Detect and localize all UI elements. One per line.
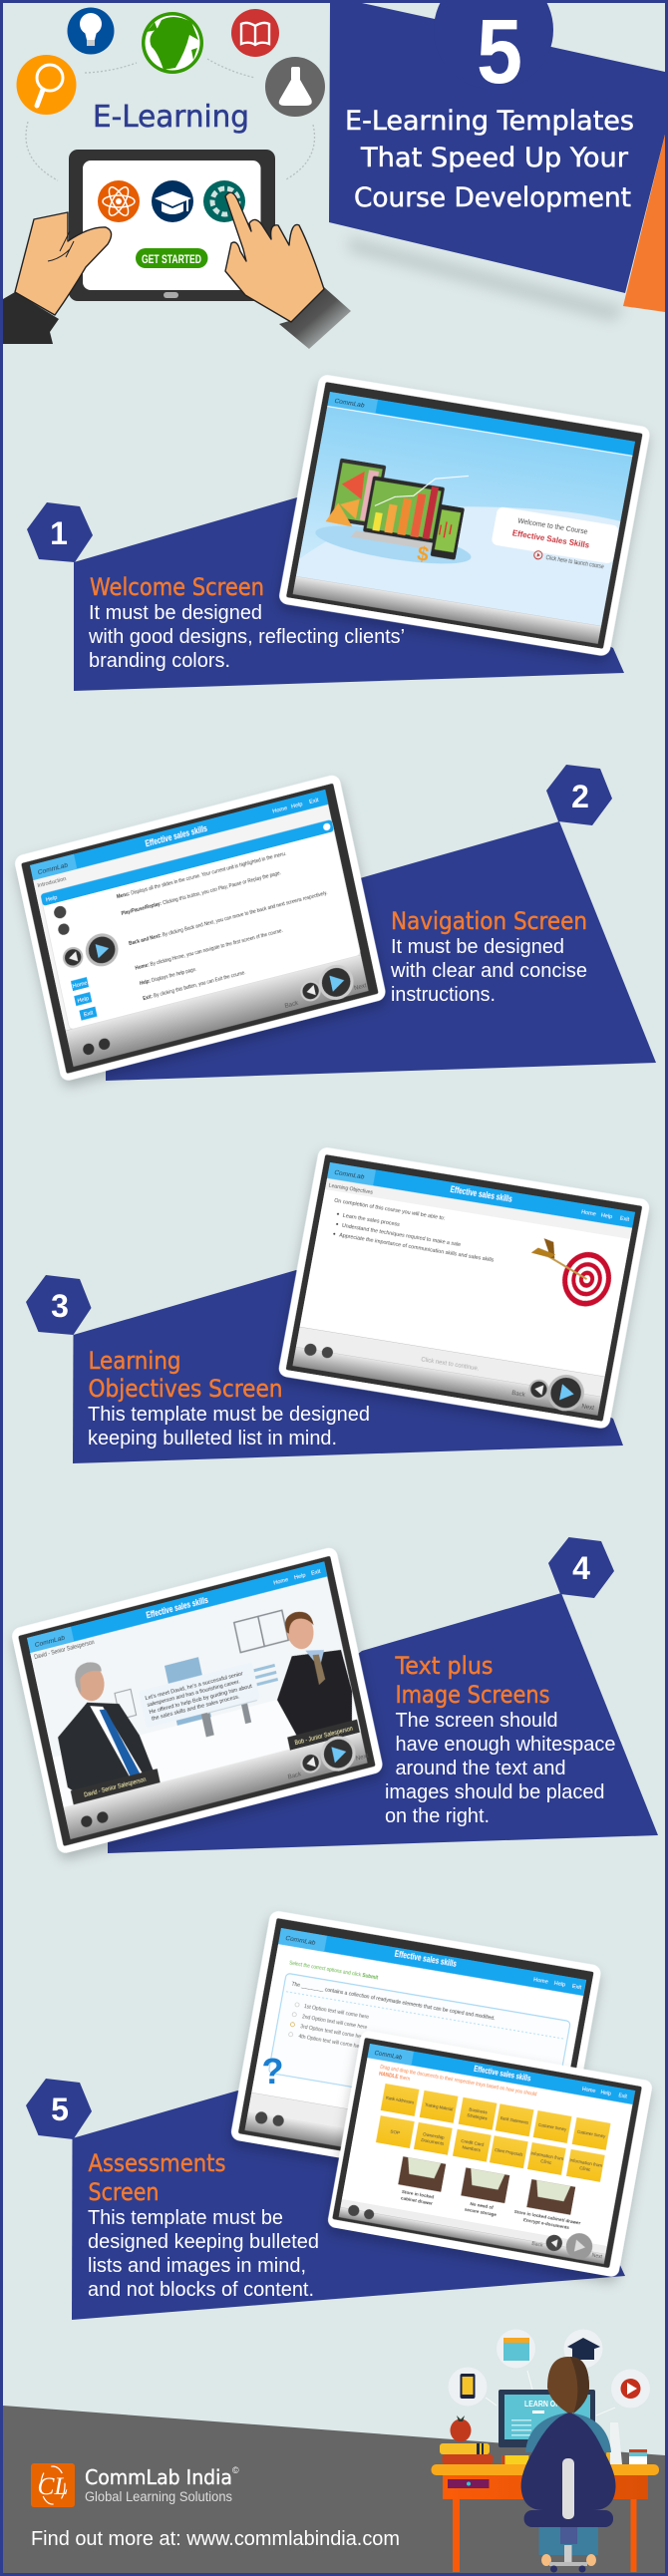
objectives list [328, 1198, 501, 1264]
section 1: welcome screen [27, 374, 651, 691]
sticky notes: Training Material [425, 2101, 454, 2111]
text: navigation screen: It must be designed [391, 936, 564, 958]
sticky notes: Information from [569, 2157, 603, 2168]
ribbon [73, 1270, 623, 1463]
text: welcome screen [88, 573, 405, 672]
text: learning objectives [88, 1347, 370, 1449]
icon: atom [98, 180, 140, 222]
right hand [225, 192, 351, 349]
objectives list: Appreciate the importance of communication skills and sales skills [339, 1233, 495, 1264]
screenshot: navigation [13, 774, 387, 1083]
screenshot: drag and drop: Drag and drop the documents to their respective trays based on how you should [380, 2065, 537, 2097]
section 4: text plus image screens [10, 1537, 658, 1855]
e-learning illustration [3, 8, 351, 349]
speech box [139, 1662, 260, 1729]
heading: E-Learning: E-Learning [93, 100, 249, 135]
document trays: cabinet drawer [401, 2195, 434, 2206]
document trays [396, 2156, 587, 2232]
screenshot: navigation: Exit [309, 798, 320, 805]
text: assessments: and not blocks of content. [88, 2279, 314, 2301]
text: text plus image: The screen should [395, 1710, 558, 1732]
icon: palette [203, 180, 245, 222]
player controls: Next [591, 2253, 603, 2261]
sticky notes: Information from [530, 2150, 564, 2161]
text: learning objectives: This template must be designed [88, 1404, 370, 1426]
screenshot: multiple choice quiz: Help [553, 1981, 566, 1989]
desk [431, 2464, 659, 2572]
answer options: 3rd Option text will come here [300, 2024, 366, 2041]
sticky notes: Credit Card [461, 2138, 485, 2147]
document trays: secure storage [465, 2206, 498, 2217]
text: navigation screen: Navigation Screen [391, 907, 587, 935]
name tags [71, 1718, 360, 1805]
button: get started [136, 248, 207, 268]
screenshot: navigation: Introduction [37, 876, 67, 889]
sticky notes: SOP [390, 2128, 401, 2135]
screenshot: drag and drop: CommLab [374, 2050, 403, 2062]
help dialog: Home [72, 980, 88, 990]
player controls: Back [284, 1000, 300, 1010]
text: welcome screen: branding colors. [89, 650, 230, 672]
screenshot: text plus image: Exit [311, 1569, 322, 1577]
monitor: LEARN ONLINE [524, 2400, 577, 2409]
screenshot: text plus image: Effective sales skills [146, 1595, 209, 1621]
screenshot: objectives: Exit [619, 1216, 630, 1223]
help dialog: Play/Pause/Replay: Clicking this button, you can Play, Pause or Replay the page. [121, 870, 282, 917]
screenshot: objectives: CommLab [334, 1169, 365, 1181]
help dialog [40, 819, 361, 1030]
icon bubbles [449, 2329, 650, 2409]
text: assessments: designed keeping bulleted [88, 2231, 319, 2253]
document trays: Encrypt e-documents [523, 2217, 570, 2230]
sticky notes: Rank Addresses [386, 2094, 415, 2104]
screenshot: text plus image: David - Senior Salesperson [34, 1640, 95, 1661]
screenshot: welcome [278, 374, 651, 657]
hexagon number 4: 4 [572, 1550, 590, 1586]
welcome card: Effective Sales Skills [511, 527, 590, 550]
hexagon number 5: 5 [51, 2092, 69, 2127]
help dialog: Help [45, 895, 58, 903]
text: welcome screen: with good designs, reflecting clients’ [88, 626, 405, 648]
document trays: Store in locked [402, 2189, 435, 2200]
screenshot: welcome: CommLab [334, 398, 365, 410]
screenshot: navigation: Effective sales skills [145, 823, 208, 849]
screenshot: navigation: CommLab [37, 862, 69, 876]
icon: book [231, 9, 279, 57]
big number 5: 5 [477, 1, 522, 103]
screenshot: multiple choice quiz: Effective sales skills [394, 1949, 458, 1969]
sticky notes: Customer Survey [577, 2128, 606, 2138]
icon: light bulb [68, 8, 114, 54]
screenshot: multiple choice quiz: The ________ contains a collection of readymade elements that can be copied and modified. [291, 1981, 496, 2022]
icon: graduation cap [152, 180, 193, 222]
text: assessments: Assessments [88, 2149, 225, 2177]
screenshot: drag and drop [327, 2030, 653, 2278]
ribbon [108, 1593, 658, 1853]
objectives list: Learn the sales process [342, 1213, 401, 1228]
section 2: navigation screen [13, 765, 656, 1083]
icon: globe [142, 12, 203, 74]
answer options: 1st Option text will come here [303, 2004, 369, 2021]
screenshot: text plus image [10, 1546, 384, 1855]
screenshot: drag and drop: Help [600, 2090, 611, 2097]
player controls [301, 1332, 599, 1416]
help dialog: Menu: Displays all the slides in the course. Your current unit is highlighted in the menu. [117, 851, 287, 900]
player controls: Back [287, 1771, 303, 1781]
sticky notes: Documents [421, 2137, 445, 2146]
screenshot: multiple choice quiz: Exit [571, 1984, 582, 1991]
text: text plus image: images should be placed [385, 1781, 604, 1803]
text: text plus image: Image Screens [395, 1681, 550, 1709]
objectives list: On completion of this course you will be able to: [334, 1198, 446, 1222]
text: assessments: This template must be [88, 2207, 283, 2229]
hexagon number 5 [26, 2079, 92, 2139]
screenshot: multiple choice quiz: CommLab [285, 1935, 316, 1947]
player controls: Back [511, 1390, 526, 1399]
footer band [3, 2406, 665, 2573]
speech box: Let’s meet David, he’s a successful senior [145, 1671, 244, 1702]
sticky notes: Client Proposals [495, 2147, 523, 2157]
ribbon [106, 821, 656, 1081]
sticky notes: Ownership [423, 2131, 445, 2140]
help dialog: Back and Next: By clicking Back and Next, you can move to the back and next screens respectively. [129, 890, 328, 947]
hexagon number 2: 2 [571, 779, 589, 814]
answer options [288, 2002, 369, 2051]
screenshot: objectives [277, 1146, 651, 1430]
icon: magnifier [16, 55, 76, 115]
text: text plus image: on the right. [385, 1805, 490, 1827]
text: navigation screen [390, 907, 587, 1006]
speech box: the sales skills and the sales process. [152, 1694, 240, 1723]
objectives list: Understand the techniques required to make a sale [341, 1223, 462, 1248]
ribbon [72, 2091, 625, 2320]
screenshot: multiple choice quiz: Select the correct options and click Submit [289, 1960, 379, 1981]
sticky notes: Numbers [462, 2144, 482, 2152]
welcome card: Click here to launch course [545, 554, 605, 571]
answer options: 2nd Option text will come here [302, 2014, 368, 2031]
illustration: devices with charts [312, 454, 486, 573]
welcome card: Welcome to the Course [517, 516, 588, 536]
logo: CommLab India: CommLab India [85, 2465, 232, 2489]
screenshot: drag and drop: Home [581, 2087, 596, 2094]
screenshot: navigation: Help [291, 802, 303, 810]
sticky notes: Clinic [540, 2158, 552, 2165]
text: text plus image [385, 1652, 616, 1827]
title: E-Learning Templates [345, 106, 634, 137]
text: assessments: lists and images in mind, [88, 2255, 306, 2277]
text: assessments [88, 2149, 319, 2301]
sticky notes [375, 2084, 611, 2182]
text: learning objectives: Learning [88, 1347, 181, 1375]
illustration: learner at desk [431, 2329, 659, 2572]
welcome card [490, 506, 619, 572]
icon: question mark: ? [261, 2051, 283, 2092]
screenshot: drag and drop: HANDLE them [378, 2072, 411, 2083]
ribbon [74, 497, 624, 691]
text: welcome screen: It must be designed [89, 602, 262, 624]
player controls: Next [354, 982, 368, 992]
screenshot: objectives: Learning Objectives [328, 1183, 373, 1196]
name tags: David - Senior Salesperson [84, 1777, 147, 1798]
speech box: salesperson and has a flourishing career. [147, 1679, 241, 1709]
screenshot: text plus image: CommLab [34, 1635, 66, 1649]
speech box: He offered to help Bob by guiding him about [149, 1684, 253, 1716]
document trays: Store in locked cabinet/ drawer [513, 2209, 581, 2226]
illustration: devices with charts: $ [415, 543, 431, 566]
monitor [499, 2390, 595, 2447]
player controls [79, 958, 368, 1065]
logo: CommLab India: © [232, 2465, 239, 2475]
header banner [329, 0, 665, 321]
screenshot: multiple choice quiz: Home [533, 1977, 548, 1986]
tablet [69, 150, 275, 301]
section 3: learning objectives screen [26, 1146, 651, 1463]
sticky notes: Customer Survey [538, 2122, 567, 2132]
text: welcome screen: Welcome Screen [90, 573, 264, 601]
screenshot: drag and drop: Effective sales skills [474, 2065, 531, 2084]
text: navigation screen: with clear and concise [390, 960, 587, 982]
help dialog: Exit: By clicking this button, you can Exit the course. [143, 970, 246, 1002]
help dialog: Home: By clicking Home, you can navigate to the first screen of the course. [135, 928, 283, 972]
screenshot: navigation: Home [272, 805, 288, 815]
person: Bob [260, 1602, 359, 1742]
player controls [347, 2192, 606, 2264]
screenshot: text plus image: Help [294, 1573, 306, 1581]
screenshot: multiple choice quiz [229, 1910, 602, 2195]
office backdrop [35, 1597, 361, 1807]
logo: CommLab India [31, 2463, 239, 2507]
desk items [440, 2415, 647, 2464]
text: navigation screen: instructions. [391, 984, 496, 1006]
hexagon number 1 [27, 502, 93, 562]
screenshot: objectives: Help [600, 1213, 613, 1220]
hexagon number 3: 3 [51, 1288, 69, 1324]
sticky notes: Clinic [579, 2165, 591, 2172]
icon: target and dart [523, 1237, 617, 1310]
screenshot: objectives: Click next to continue. [421, 1356, 480, 1373]
screenshot: text plus image: Home [273, 1577, 289, 1587]
player controls: Next [355, 1753, 369, 1763]
text: assessments: Screen [88, 2178, 160, 2206]
sticky notes: Strategies [467, 2112, 489, 2121]
text: text plus image: Text plus [395, 1652, 493, 1680]
title [345, 106, 634, 213]
hexagon number 1: 1 [50, 515, 68, 551]
name tags: Bob - Junior Salesperson [294, 1726, 353, 1747]
text: learning objectives: keeping bulleted list in mind. [88, 1428, 337, 1449]
hexagon number 3 [26, 1275, 92, 1335]
learner and chair [521, 2357, 616, 2572]
sticky notes: Bank Statements [501, 2115, 529, 2125]
hexagon number 4 [548, 1537, 614, 1598]
text: learning objectives: Objectives Screen [88, 1375, 283, 1403]
hexagon number 2 [546, 765, 612, 825]
arrows [486, 2371, 615, 2415]
text: text plus image: around the text and [395, 1758, 566, 1779]
icon: flask [265, 57, 325, 117]
help dialog: Exit [83, 1010, 94, 1019]
screenshot: objectives: Home [580, 1209, 596, 1218]
screenshot: objectives: Effective sales skills [450, 1184, 513, 1204]
document trays: No need of [470, 2201, 495, 2210]
help dialog: Help [77, 996, 90, 1004]
answer options: 4th Option text will come here [298, 2034, 364, 2051]
title: That Speed Up Your [360, 143, 629, 173]
title: Course Development [354, 182, 631, 213]
help dialog: Help: Displays the help page. [140, 967, 197, 987]
left hand [3, 212, 112, 344]
section 5: assessments screen [26, 1910, 653, 2320]
connecting dotted arcs [26, 59, 314, 180]
button: get started: GET STARTED [142, 252, 201, 266]
player controls [77, 1730, 370, 1837]
footer link text: Find out more at: www.commlabindia.com [31, 2528, 400, 2550]
screenshot: drag and drop: Exit [618, 2093, 628, 2100]
player controls: Back [531, 2241, 543, 2249]
sticky notes: Business [469, 2106, 489, 2114]
logo: CommLab India: Global Learning Solutions [85, 2489, 232, 2504]
player controls: Next [581, 1403, 595, 1412]
text: text plus image: have enough whitespace [395, 1734, 616, 1756]
person: David [43, 1652, 156, 1800]
logo: CommLab India: CL [38, 2473, 68, 2500]
